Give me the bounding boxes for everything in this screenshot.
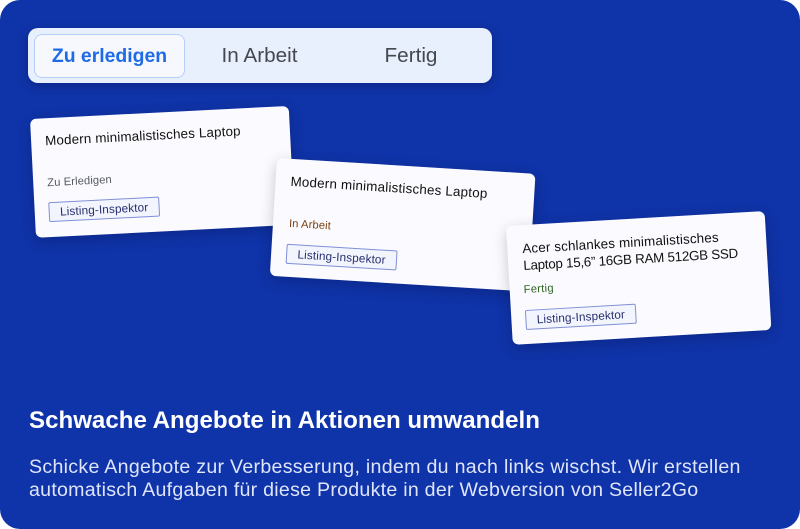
card title: Modern minimalistisches Laptop xyxy=(290,174,488,201)
card title: Acer schlankes minimalistisches xyxy=(522,230,719,256)
tab: Fertig: Fertig xyxy=(385,44,437,67)
active tab: Zu erledigen xyxy=(34,34,185,78)
description text: Schicke Angebote zur Verbesserung, indem du nach links wischst. Wir erstellen xyxy=(29,456,741,478)
card: In Arbeit xyxy=(270,158,536,292)
card: Zu Erledigen xyxy=(30,106,295,238)
tag: Listing-Inspektor xyxy=(536,307,625,326)
tag: Listing-Inspektor xyxy=(60,200,149,219)
description text: automatisch Aufgaben für diese Produkte in der Webversion von Seller2Go xyxy=(29,479,698,501)
tab: In Arbeit: In Arbeit xyxy=(222,44,297,67)
heading: Schwache Angebote in Aktionen umwandeln xyxy=(29,407,540,434)
card title: Modern minimalistisches Laptop xyxy=(45,123,241,148)
status label: Zu Erledigen xyxy=(47,174,112,189)
tag xyxy=(286,244,398,270)
tab bar xyxy=(28,28,492,83)
active tab: Zu erledigen: Zu erledigen xyxy=(52,45,167,67)
tag: Listing-Inspektor xyxy=(297,247,386,267)
tag xyxy=(48,197,160,222)
description text xyxy=(29,456,741,501)
status label: Fertig xyxy=(523,282,554,296)
card title xyxy=(522,230,738,273)
status label: In Arbeit xyxy=(289,218,331,232)
tag xyxy=(525,304,637,330)
card: Fertig xyxy=(506,211,771,345)
card title: Laptop 15,6” 16GB RAM 512GB SSD xyxy=(523,246,738,273)
